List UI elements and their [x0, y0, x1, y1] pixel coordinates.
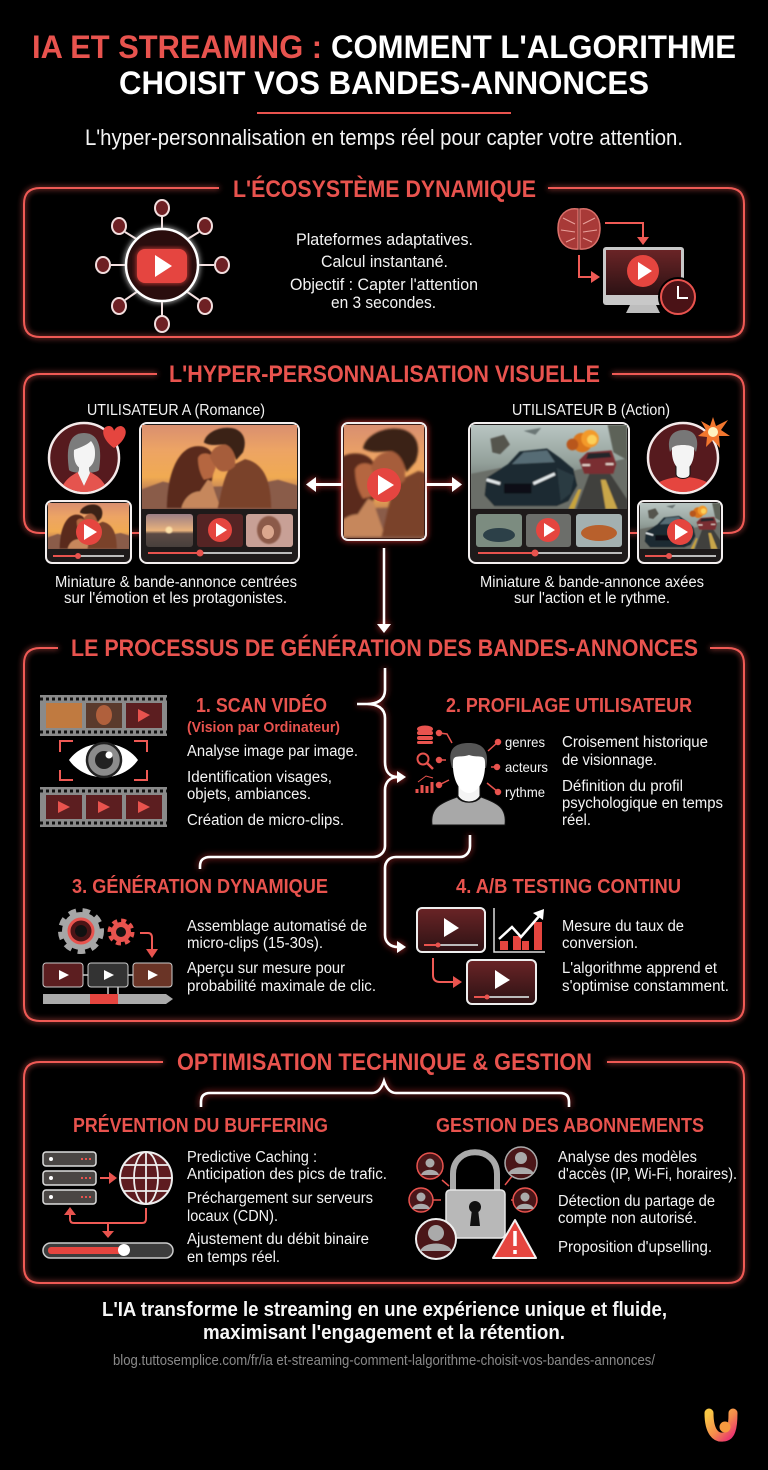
step 2: profilage — [417, 695, 723, 829]
card: central trailer — [279, 423, 489, 540]
panel: processus — [24, 634, 744, 1021]
text: écosystème: Plateformes adaptatives. — [296, 230, 473, 249]
subheading: buffering: PRÉVENTION DU BUFFERING — [73, 1114, 328, 1137]
conclusion: L'IA transforme le streaming en une expérience unique et fluide, — [102, 1299, 667, 1321]
heading: écosystème: L'ÉCOSYSTÈME DYNAMIQUE — [233, 175, 536, 203]
caption: user A: sur l'émotion et les protagonistes. — [64, 590, 287, 607]
avatar: user A with heart — [49, 423, 126, 494]
text: step 4: L'algorithme apprend et — [562, 960, 718, 977]
text: abonnements — [558, 1149, 737, 1256]
avatar: user B with explosion — [648, 417, 730, 494]
text: abonnements: Détection du partage de — [558, 1193, 715, 1210]
text: abonnements: Proposition d'upselling. — [558, 1239, 712, 1256]
text: step 1 — [187, 743, 358, 829]
text: step 2: de visionnage. — [562, 752, 657, 769]
label: utilisateur B: UTILISATEUR B (Action) — [512, 402, 670, 419]
labels: profile — [505, 734, 548, 800]
icon: user profile — [417, 726, 505, 825]
caption: user A: Miniature & bande-annonce centrées — [55, 574, 297, 591]
text: step 2: Croisement historique — [562, 734, 708, 751]
title: IA ET STREAMING : — [32, 29, 322, 65]
icon: film strip top — [40, 695, 167, 736]
icon: A/B test — [417, 908, 545, 1004]
text: buffering: Ajustement du débit binaire — [187, 1231, 369, 1248]
icon: gears and clips — [43, 910, 173, 1004]
text: abonnements: d'accès (IP, Wi-Fi, horaires). — [558, 1166, 737, 1183]
arrow: to user B — [426, 477, 462, 492]
connectors: process flow — [200, 668, 470, 953]
arrow: to user A — [306, 477, 342, 492]
text: écosystème: Calcul instantané. — [321, 252, 448, 271]
text: step 4: s'optimise constamment. — [562, 978, 729, 995]
card: romance mini — [46, 501, 131, 563]
subheading: abonnements: GESTION DES ABONNEMENTS — [436, 1115, 704, 1137]
source url: blog.tuttosemplice.com/fr/ia et-streaming-comment-lalgorithme-choisit-vos-bandes-annonces/ — [113, 1353, 656, 1369]
text: step 4 — [562, 918, 729, 995]
caption: user B — [480, 574, 704, 607]
caption: user A — [55, 574, 297, 607]
text: buffering: Anticipation des pics de trafic. — [187, 1166, 387, 1183]
panel: optimisation — [24, 1049, 744, 1283]
labels: profile: acteurs — [505, 759, 548, 775]
title: COMMENT L'ALGORITHME — [331, 29, 736, 65]
text: step 2 — [562, 734, 723, 829]
panel: hyper-personnalisation — [24, 361, 744, 607]
text: step 4: Mesure du taux de — [562, 918, 684, 935]
text: buffering: en temps réel. — [187, 1249, 280, 1266]
text: step 3 — [187, 918, 376, 995]
icon: servers and globe — [43, 1152, 173, 1258]
text: step 1: Création de micro-clips. — [187, 812, 344, 829]
text: step 3: Aperçu sur mesure pour — [187, 960, 345, 977]
step 3: génération — [43, 875, 376, 1004]
step 1: scan vidéo — [40, 694, 358, 829]
icon: film strip bottom — [40, 787, 167, 827]
heading: step 4: 4. A/B TESTING CONTINU — [456, 876, 681, 898]
icon: play network — [96, 200, 229, 332]
text: step 3: probabilité maximale de clic. — [187, 978, 376, 995]
icon: brain to monitor — [558, 209, 697, 316]
heading: step 2: 2. PROFILAGE UTILISATEUR — [446, 695, 692, 717]
text: step 1: Identification visages, — [187, 769, 332, 786]
text: step 1: Analyse image par image. — [187, 743, 358, 760]
card: romance trailer — [140, 423, 299, 563]
text: abonnements: Analyse des modèles — [558, 1149, 697, 1166]
text: step 3: Assemblage automatisé de — [187, 918, 367, 935]
text: abonnements: compte non autorisé. — [558, 1210, 697, 1227]
text: step 1: objets, ambiances. — [187, 786, 311, 803]
title — [32, 29, 736, 101]
text: step 3: micro-clips (15-30s). — [187, 935, 323, 952]
heading: step 1 — [187, 694, 340, 736]
heading: step 3: 3. GÉNÉRATION DYNAMIQUE — [72, 875, 328, 898]
heading: step 1: 1. SCAN VIDÉO — [196, 694, 327, 717]
subtitle: L'hyper-personnalisation en temps réel pour capter votre attention. — [85, 125, 683, 150]
text: step 2: Définition du profil — [562, 778, 683, 795]
text: écosystème: en 3 secondes. — [331, 293, 436, 312]
arrow: to process panel — [377, 548, 391, 633]
heading: processus: LE PROCESSUS DE GÉNÉRATION DES BANDES-ANNONCES — [71, 634, 698, 662]
heading: hyper-personnalisation: L'HYPER-PERSONNALISATION VISUELLE — [169, 361, 600, 388]
text: step 2: réel. — [562, 812, 591, 829]
text: buffering: locaux (CDN). — [187, 1208, 278, 1225]
caption: user B: sur l'action et le rythme. — [514, 590, 670, 607]
text: écosystème: Objectif : Capter l'attention — [290, 275, 478, 294]
panel: écosystème dynamique — [24, 175, 744, 337]
text: step 2: psychologique en temps — [562, 795, 723, 812]
text: écosystème — [290, 230, 478, 312]
labels: profile: genres — [505, 734, 545, 750]
conclusion: maximisant l'engagement et la rétention. — [203, 1322, 565, 1344]
card: action mini — [637, 501, 723, 563]
icon: eye — [60, 741, 147, 780]
caption: user B: Miniature & bande-annonce axées — [480, 574, 704, 591]
labels: profile: rythme — [505, 784, 545, 800]
text: step 4: conversion. — [562, 935, 638, 952]
connector: brace — [201, 1081, 569, 1107]
heading: step 1: (Vision par Ordinateur) — [187, 719, 340, 736]
logo — [709, 1413, 733, 1437]
card: action trailer — [469, 423, 629, 563]
text: buffering: Predictive Caching : — [187, 1149, 317, 1166]
title: CHOISIT VOS BANDES-ANNONCES — [119, 65, 649, 101]
heading: optimisation: OPTIMISATION TECHNIQUE & GESTION — [177, 1049, 592, 1076]
text: buffering: Préchargement sur serveurs — [187, 1190, 373, 1207]
conclusion — [102, 1299, 667, 1344]
label: utilisateur A: UTILISATEUR A (Romance) — [87, 402, 265, 419]
text: buffering — [187, 1149, 387, 1266]
icon: lock and accounts — [409, 1147, 537, 1259]
step 4: A/B testing — [417, 876, 729, 1004]
